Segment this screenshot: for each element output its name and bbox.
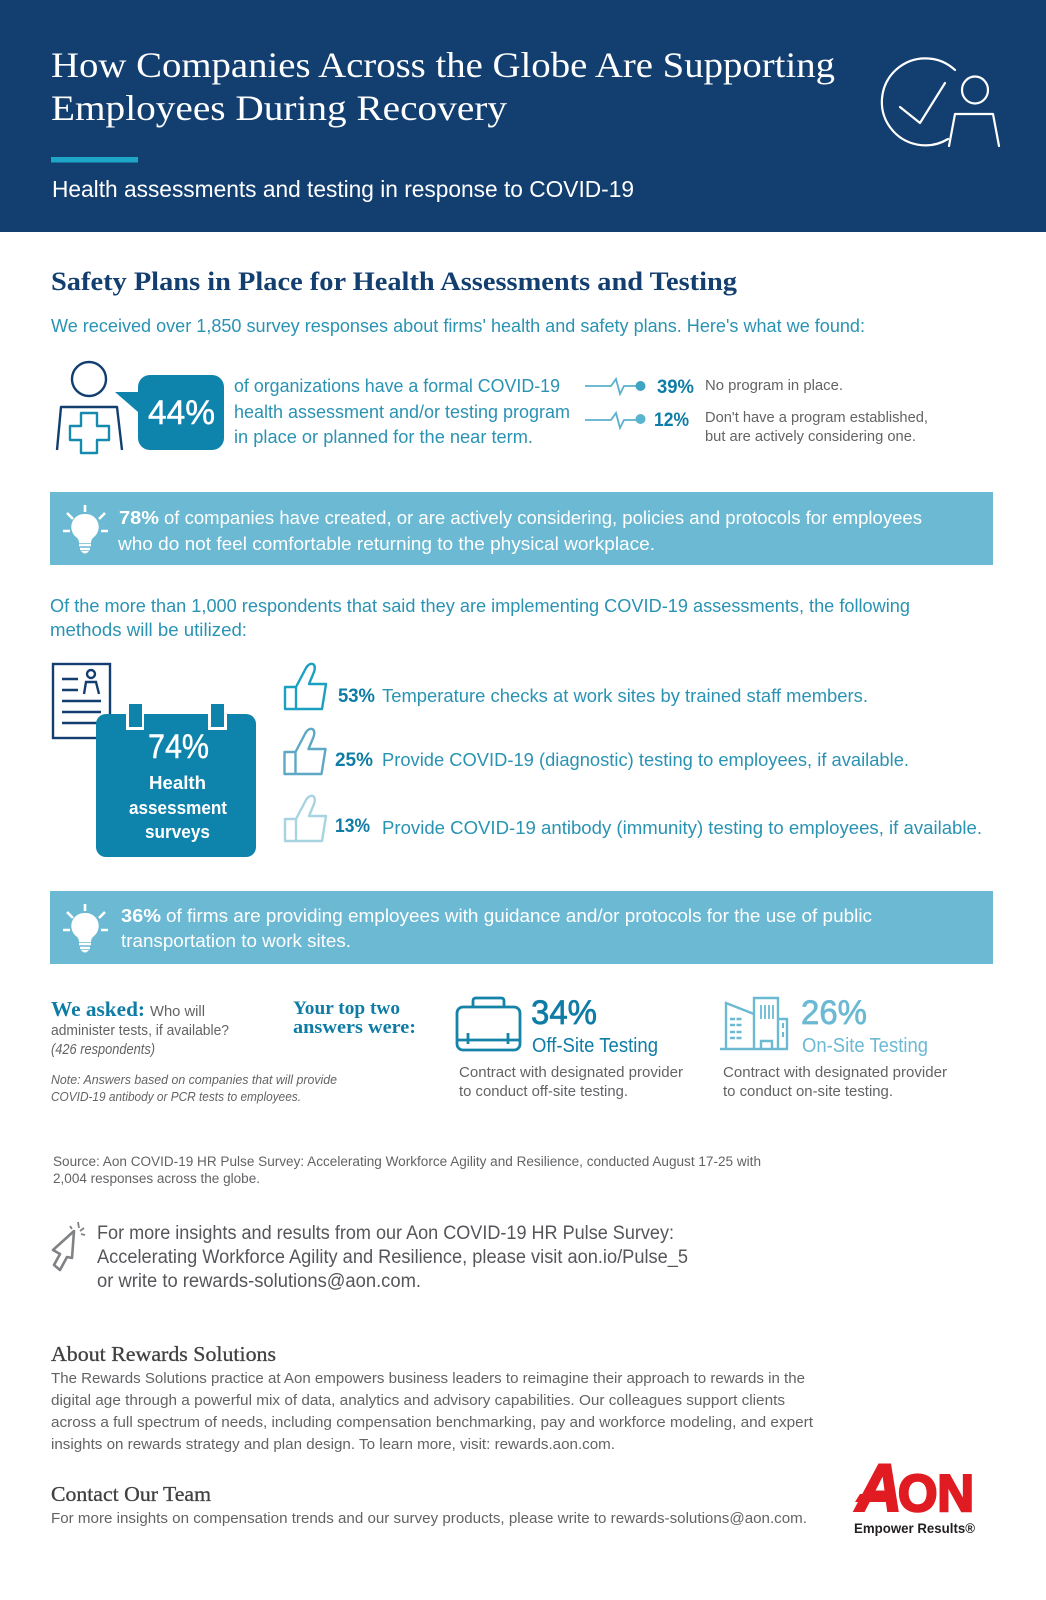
text: more insights: For more insights and results from our Aon COVID-19 HR Pulse Survey:: [97, 1223, 674, 1244]
banner: 78%: who do not feel comfortable returning to the physical workplace.: [117, 533, 655, 554]
text: your top two answers: [293, 999, 416, 1038]
icon: check mark and person: [882, 58, 999, 146]
text: formal program: in place or planned for the near term.: [234, 426, 533, 447]
answer: off-site testing: Off-Site Testing: [532, 1035, 658, 1057]
card: 74% health assessment surveys: [96, 704, 256, 857]
answer: off-site testing: [457, 994, 683, 1100]
banner: 36%: 36%: [121, 905, 161, 926]
about rewards solutions: The Rewards Solutions practice at Aon empowers business leaders to reimagine their approach to rewards in the: [51, 1370, 805, 1387]
method: antibody testing: [285, 796, 982, 841]
answer: on-site testing: [720, 994, 947, 1100]
callout: 44%: [115, 375, 224, 450]
source note: 2,004 responses across the globe.: [53, 1171, 260, 1186]
icon: person with medical cross: [57, 362, 122, 453]
banner: 36%: [50, 891, 993, 964]
title: Employees During Recovery: [51, 88, 507, 128]
source note: Source: Aon COVID-19 HR Pulse Survey: Accelerating Workforce Agility and Resilience, conducted August 17-25 with: [53, 1154, 761, 1169]
method: temperature checks: [285, 664, 868, 709]
stat: 39% no program: 39%: [657, 377, 694, 398]
section heading: Safety Plans in Place for Health Assessments and Testing: [51, 267, 737, 296]
about rewards solutions: across a full spectrum of needs, including compensation benchmarking, pay and workforce modeling, and expert: [51, 1414, 814, 1431]
logo: Aon Empower Results: A: [854, 1451, 902, 1526]
text: more insights: or write to rewards-solutions@aon.com.: [97, 1271, 421, 1292]
method: temperature checks: Temperature checks at work sites by trained staff members.: [382, 685, 868, 706]
answer: off-site testing: 34%: [531, 994, 597, 1032]
text: your top two answers: answers were:: [293, 1018, 416, 1038]
answer: on-site testing: Contract with designated provider: [723, 1064, 947, 1081]
logo: Aon Empower Results: [854, 1451, 976, 1536]
stat: 12% considering: [585, 410, 928, 445]
card: 74% health assessment surveys: surveys: [145, 822, 210, 842]
note: Note: Answers based on companies that will provide: [51, 1072, 337, 1087]
logo: Aon Empower Results: ON: [898, 1465, 974, 1523]
method: diagnostic testing: Provide COVID-19 (diagnostic) testing to employees, if available.: [382, 749, 909, 770]
text: your top two answers: Your top two: [293, 999, 400, 1019]
about rewards solutions: About Rewards Solutions: [51, 1342, 276, 1366]
about rewards solutions: digital age through a powerful mix of data, analytics and advisory capabilities. Our colleagues support clients: [51, 1392, 785, 1409]
header panel: [0, 0, 1046, 232]
text: we asked: (426 respondents): [51, 1042, 155, 1058]
banner: 78%: 78%: [119, 507, 159, 528]
answer: on-site testing: to conduct on-site testing.: [723, 1083, 893, 1100]
stat: 12% considering: Don't have a program established,: [705, 410, 928, 426]
icon: thumb up: [285, 664, 326, 709]
text: formal program: [234, 375, 570, 447]
icon: cursor click: [53, 1222, 85, 1270]
method: diagnostic testing: [284, 729, 909, 774]
card: 74% health assessment surveys: 74%: [148, 728, 209, 766]
text: methods intro: Of the more than 1,000 respondents that said they are implementing COVID-19 assessments, the following: [50, 595, 910, 616]
card: 74% health assessment surveys: Health: [149, 773, 206, 793]
stat: 12% considering: but are actively considering one.: [705, 429, 916, 445]
note: [51, 1072, 337, 1104]
stat: 12% considering: 12%: [654, 410, 689, 431]
card: 74% health assessment surveys: assessment: [129, 798, 227, 818]
text: more insights: Accelerating Workforce Agility and Resilience, please visit aon.io/Pulse_5: [97, 1247, 688, 1268]
icon: office buildings: [720, 998, 788, 1049]
text: we asked: Who will: [150, 1004, 205, 1020]
contact our team: Contact Our Team: [51, 1482, 211, 1506]
text: methods intro: [50, 595, 910, 640]
text: we asked: We asked:: [51, 997, 145, 1021]
about rewards solutions: insights on rewards strategy and plan design. To learn more, visit: rewards.aon.com.: [51, 1436, 615, 1453]
title: [51, 45, 835, 128]
method: antibody testing: Provide COVID-19 antibody (immunity) testing to employees, if available.: [382, 817, 982, 838]
accent bar: [51, 157, 138, 162]
method: temperature checks: 53%: [338, 686, 375, 707]
note: COVID-19 antibody or PCR tests to employees.: [51, 1089, 301, 1104]
answer: on-site testing: On-Site Testing: [802, 1035, 928, 1057]
answer: on-site testing: 26%: [801, 994, 867, 1032]
icon: briefcase: [457, 998, 520, 1050]
answer: off-site testing: Contract with designated provider: [459, 1064, 683, 1081]
callout: 44%: 44%: [148, 394, 215, 432]
source note: [53, 1154, 761, 1186]
icon: light bulb: [63, 904, 108, 952]
subtitle: Health assessments and testing in response to COVID-19: [52, 176, 634, 202]
contact our team: [51, 1482, 807, 1527]
text: more insights: [97, 1223, 688, 1292]
text: methods intro: methods will be utilized:: [50, 619, 247, 640]
text: we asked: administer tests, if available?: [51, 1023, 229, 1039]
icon: thumb up: [285, 796, 326, 841]
icon: survey document: [53, 664, 110, 738]
banner: 36%: of firms are providing employees with guidance and/or protocols for the use of public: [166, 905, 872, 926]
answer: off-site testing: to conduct off-site testing.: [459, 1083, 628, 1100]
banner: 78%: [50, 492, 993, 565]
method: antibody testing: 13%: [335, 816, 370, 837]
logo: Aon Empower Results: Empower Results®: [854, 1520, 976, 1536]
text: formal program: health assessment and/or testing program: [234, 401, 570, 422]
banner: 36%: transportation to work sites.: [121, 930, 351, 951]
method: diagnostic testing: 25%: [335, 750, 373, 771]
icon: light bulb: [63, 505, 108, 554]
text: formal program: of organizations have a formal COVID-19: [234, 375, 560, 396]
banner: 78%: of companies have created, or are actively considering, policies and protocols for employees: [164, 507, 922, 528]
title: How Companies Across the Globe Are Supporting: [51, 45, 835, 85]
contact our team: For more insights on compensation trends and our survey products, please write to rewards-solutions@aon.com.: [51, 1510, 807, 1527]
icon: thumb up: [284, 729, 326, 774]
text: we asked: [51, 997, 229, 1058]
stat: 39% no program: No program in place.: [705, 378, 843, 394]
intro text: We received over 1,850 survey responses about firms' health and safety plans. Here's what we found:: [51, 315, 865, 336]
stat: 39% no program: [585, 377, 843, 398]
about rewards solutions: [51, 1342, 814, 1453]
